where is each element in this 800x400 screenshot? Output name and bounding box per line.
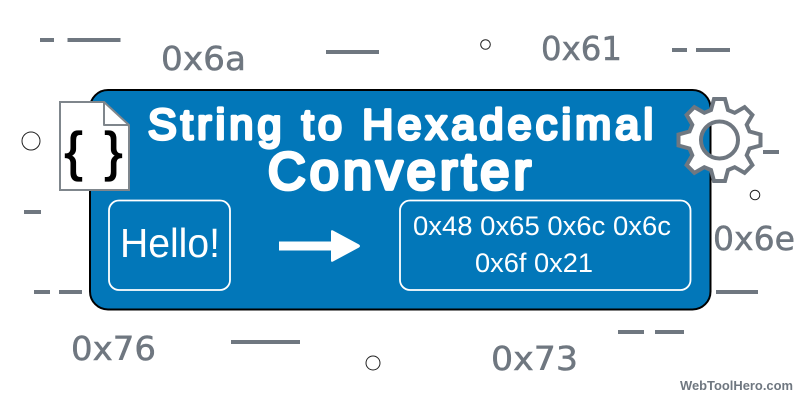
- watermark: WebToolHero.com: [680, 379, 793, 393]
- heading line 1: String to Hexadecimal: [148, 101, 653, 149]
- output box: 0x6f 0x21: [475, 248, 593, 278]
- panel background: [90, 90, 710, 310]
- output box: 0x48 0x65 0x6c 0x6c: [413, 211, 671, 241]
- panel: converter: [90, 90, 710, 310]
- icon: code file: {: [64, 122, 83, 182]
- input box: [109, 200, 230, 290]
- background hex label 0x76: 0x76: [71, 329, 156, 368]
- icon: code file: }: [104, 122, 123, 182]
- input box: Hello!: [120, 220, 220, 266]
- arrow: [279, 230, 360, 262]
- background hex label 0x6a: 0x6a: [161, 39, 246, 78]
- heading line 2: Converter: [268, 143, 531, 201]
- icon: gear: [678, 99, 760, 181]
- output box: [400, 200, 690, 290]
- background hex label 0x73: 0x73: [491, 339, 578, 378]
- background hex label 0x61: 0x61: [541, 29, 622, 68]
- icon: code file: [60, 102, 129, 190]
- background hex label 0x6e: 0x6e: [713, 219, 795, 258]
